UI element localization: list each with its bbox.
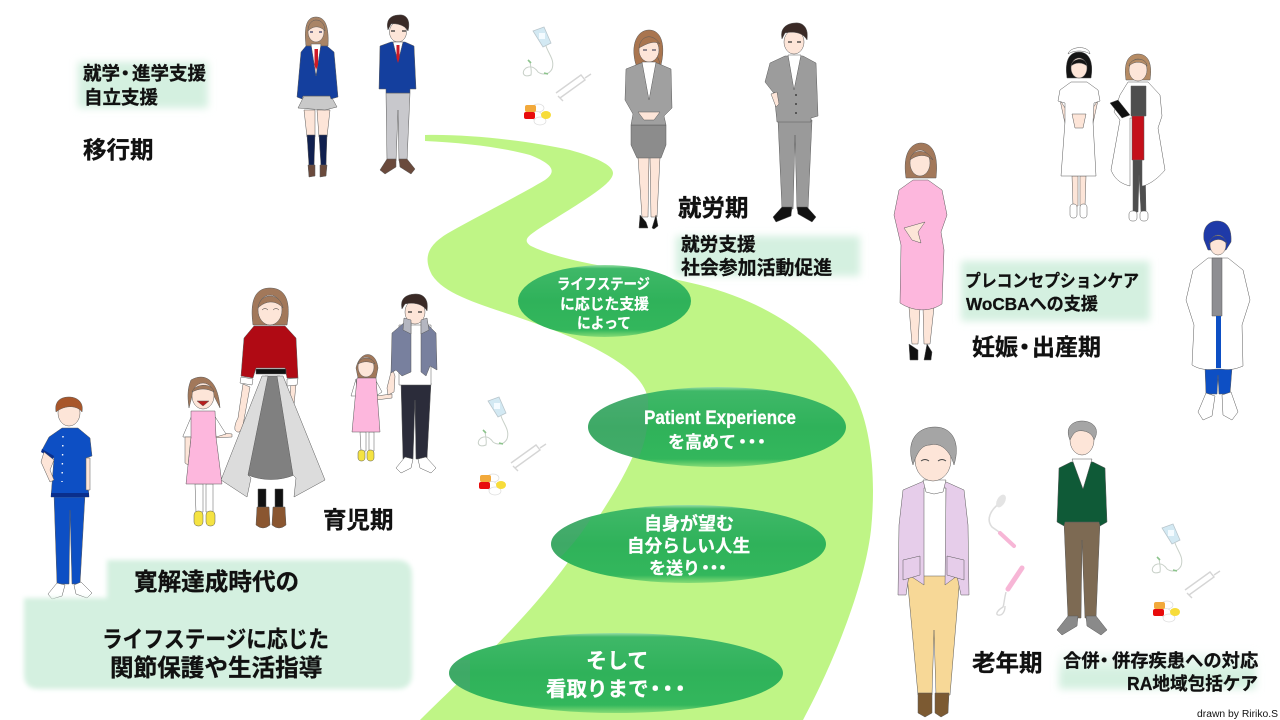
ellipse: そして看取りまで: ・ <box>645 678 666 701</box>
ellipse: 自身が望む自分らしい人生を送り: 自分らしい人生 <box>627 536 750 556</box>
figure: schoolgirl <box>297 17 338 177</box>
ellipse: そして看取りまで: ・ <box>658 678 678 701</box>
figure: mother in red top <box>221 288 325 528</box>
ellipse: Patient Experienceを高めて: を高めて <box>668 432 736 452</box>
callout: プレコンセプションケア WoCBAへの支援: WoCBAへの支援 <box>966 294 1098 314</box>
heading: 移行期: 移行期 <box>83 137 154 163</box>
ellipse: 自身が望む自分らしい人生を送り <box>545 500 826 583</box>
ellipse: Patient Experienceを高めて <box>580 385 846 470</box>
figure: little girl with mother <box>183 377 232 526</box>
callout: 就学・進学支援 自立支援: 進学支援 <box>132 63 207 84</box>
heading: 老年期: 老年期 <box>972 650 1042 676</box>
heading: 育児期: 育児期 <box>323 507 394 533</box>
ellipse: 自身が望む自分らしい人生を送り: ・ <box>706 559 722 578</box>
callout: 合併・併存疾患への対応 RA地域包括ケア: 併存疾患への対応 <box>1112 650 1258 671</box>
figure: small girl with father <box>351 354 392 461</box>
callout: 就労支援 社会参加活動促進 <box>676 234 860 279</box>
callout: 寛解達成時代のライフステージに応じた関節保護や生活指導 <box>24 560 412 689</box>
callout: 合併・併存疾患への対応 RA地域包括ケア: 合併 <box>1063 650 1100 671</box>
callout: プレコンセプションケア WoCBAへの支援 <box>961 261 1150 321</box>
heading: 就労期: 就労期 <box>678 195 748 221</box>
figure: woman in grey suit <box>625 30 672 229</box>
ellipse: ライフステージに応じた支援によって: に応じた支援 <box>560 296 649 313</box>
figure: nurse <box>1058 48 1100 218</box>
figure: pregnant woman <box>894 143 947 360</box>
ellipse: ライフステージに応じた支援によって <box>518 265 691 337</box>
icon: IV bag, syringe and pills (middle) <box>478 397 546 495</box>
icon: long-handled brush <box>989 493 1014 546</box>
ellipse: 自身が望む自分らしい人生を送り: ・ <box>714 559 731 578</box>
icon: IV bag, syringe and pills (bottom right) <box>1152 524 1220 622</box>
ellipse: Patient Experienceを高めて: Patient Experience <box>644 408 796 429</box>
callout: 合併・併存疾患への対応 RA地域包括ケア: ・ <box>1095 650 1113 671</box>
ellipse: そして看取りまで <box>440 633 783 715</box>
ellipse: Patient Experienceを高めて: ・ <box>753 433 770 452</box>
figure: schoolboy <box>379 15 416 174</box>
ellipse: そして看取りまで: 看取りまで <box>546 678 648 701</box>
ellipse: Patient Experienceを高めて: ・ <box>734 433 751 452</box>
ellipse: ライフステージに応じた支援によって: によって <box>577 315 631 332</box>
figure: male doctor <box>1186 221 1250 420</box>
ellipse: 自身が望む自分らしい人生を送り: を送り <box>649 559 700 578</box>
callout: 就学・進学支援 自立支援: 自立支援 <box>84 87 159 108</box>
ellipse: 自身が望む自分らしい人生を送り: 自身が望む <box>644 513 734 534</box>
callout: 寛解達成時代のライフステージに応じた関節保護や生活指導: 寛解達成時代の <box>134 569 299 596</box>
credit: drawn by Ririko.S: drawn by Ririko.S <box>1197 709 1278 720</box>
icon: IV bag, syringe and pills (top) <box>523 27 591 125</box>
road: winding green path <box>420 135 873 720</box>
ellipse: そして看取りまで: そして <box>586 650 648 673</box>
figure: elderly man <box>1057 421 1107 635</box>
callout: 合併・併存疾患への対応 RA地域包括ケア <box>1059 650 1258 694</box>
ellipse: Patient Experienceを高めて: ・ <box>744 433 760 452</box>
callout: 寛解達成時代のライフステージに応じた関節保護や生活指導: 関節保護や生活指導 <box>110 655 322 682</box>
callout: 寛解達成時代のライフステージに応じた関節保護や生活指導: ライフステージに応じた <box>102 626 329 652</box>
ellipse: ライフステージに応じた支援によって: ライフステージ <box>557 276 650 293</box>
callout: 就労支援 社会参加活動促進: 就労支援 <box>681 234 756 255</box>
icon: long-handled comb <box>997 568 1022 615</box>
figure: father in hoodie <box>387 294 437 473</box>
heading: 妊娠・出産期: 出産期 <box>1032 334 1101 360</box>
ellipse: 自身が望む自分らしい人生を送り: ・ <box>697 559 714 578</box>
figure: man in grey suit <box>765 23 818 222</box>
callout: プレコンセプションケア WoCBAへの支援: プレコンセプションケア <box>965 271 1139 291</box>
heading: 妊娠・出産期: ・ <box>1013 334 1036 360</box>
figure: female doctor <box>1110 54 1165 221</box>
figure: boy in blue uniform <box>41 397 92 599</box>
ellipse: そして看取りまで: ・ <box>670 678 690 701</box>
callout: 就学・進学支援 自立支援: 就学 <box>83 63 120 84</box>
callout: 就労支援 社会参加活動促進: 社会参加活動促進 <box>681 257 832 279</box>
heading: 妊娠・出産期: 妊娠 <box>972 334 1018 360</box>
callout: 就学・進学支援 自立支援 <box>78 62 208 108</box>
callout: 合併・併存疾患への対応 RA地域包括ケア: RA地域包括ケア <box>1127 673 1258 694</box>
callout: 就学・進学支援 自立支援: ・ <box>116 63 135 84</box>
figure: elderly woman <box>898 427 969 717</box>
